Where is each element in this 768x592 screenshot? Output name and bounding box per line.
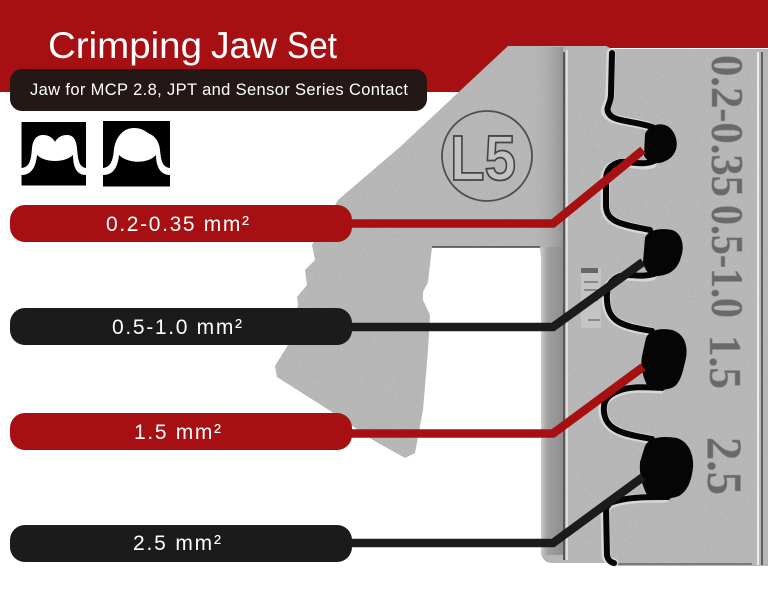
die mark L5 [442,111,532,201]
crimping jaw photo [275,46,768,566]
leader line [345,262,643,327]
size marking 0.5-1.0: 0.5-1.0 [702,205,752,318]
leader line [345,477,643,543]
label pill [10,205,352,242]
subtitle bar: Jaw for MCP 2.8, JPT and Sensor Series Contact [30,81,408,99]
cavity 0.2-0.35 [644,124,677,163]
strip edge lines [432,50,762,565]
size marking 0.2-0.35: 0.2-0.35 [702,55,752,197]
label pill [10,308,352,345]
shaded band beside the strip [541,247,563,555]
size marking 1.5: 1.5 [700,335,750,389]
die mark letters: L5 [450,122,516,194]
wedge shading above the window [530,47,563,247]
crimp cavities [640,124,693,499]
title: Jaw [211,25,277,66]
cavity 2.5 [640,437,693,499]
cavity 0.5-1.0 [643,229,683,276]
callout: 0.5-1.0 mm² [10,262,643,345]
cavity 1.5 [641,329,687,390]
label text: 2.5 mm² [133,532,221,555]
callout: 2.5 mm² [10,477,643,562]
leader line [345,367,643,434]
callout: 1.5 mm² [10,367,643,450]
red header band [0,0,768,92]
label text: 0.5-1.0 mm² [112,316,242,339]
title: Set [287,25,338,66]
label pill [10,413,352,450]
stamped maker mark [581,268,601,328]
label text: 0.2-0.35 mm² [106,213,249,236]
jaw body [275,46,768,566]
jaw gap contour [604,53,668,563]
callout: 0.2-0.35 mm² [10,150,643,242]
subtitle bar [10,69,427,111]
label pill [10,525,352,562]
leader line [345,150,643,224]
title: Crimping [48,25,202,66]
icon: single-lobed crimp profile [103,121,170,186]
label text: 1.5 mm² [134,421,221,444]
die mark ring [442,111,532,201]
size marking 2.5: 2.5 [697,437,753,495]
contour highlight [603,53,665,563]
title [48,25,338,66]
icon: double-lobed crimp profile [22,122,86,186]
